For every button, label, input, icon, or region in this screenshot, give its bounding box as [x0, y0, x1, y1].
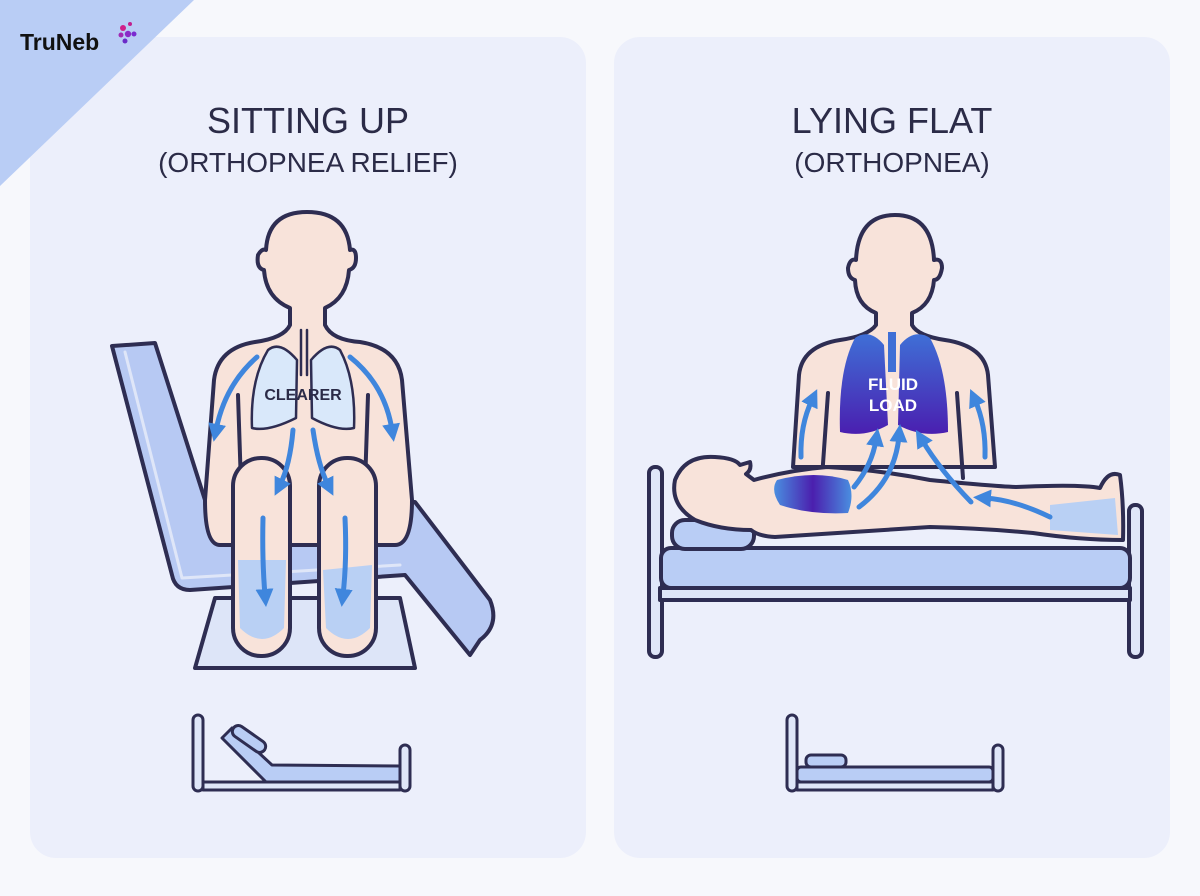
body [205, 212, 412, 656]
title: right [792, 100, 992, 178]
label: fluid load: FLUID [868, 375, 918, 394]
title: left: SITTING UP [207, 100, 409, 141]
icon: raised bed [193, 715, 410, 791]
icon: flat bed [787, 715, 1003, 791]
illustration: sitting [112, 212, 493, 668]
lying body [674, 457, 1123, 540]
lungs: fluid load [840, 332, 948, 434]
title: left [158, 100, 458, 178]
title: left: (ORTHOPNEA RELIEF) [158, 147, 458, 178]
chair [112, 343, 493, 668]
panel: left [30, 37, 586, 858]
standing torso [793, 215, 995, 478]
arrows: sitting [216, 357, 392, 595]
lungs: clearer [252, 330, 354, 429]
label: clearer: CLEARER [264, 387, 342, 404]
label: fluid load: LOAD [869, 396, 917, 415]
corner triangle [0, 0, 194, 186]
title: right: (ORTHOPNEA) [794, 147, 990, 178]
illustration: lying [649, 215, 1142, 657]
arrows: lying [801, 400, 1050, 517]
panel: right [614, 37, 1170, 858]
label: fluid load [868, 375, 918, 415]
logo: TruNeb [20, 29, 99, 55]
bed [649, 467, 1142, 657]
title: right: LYING FLAT [792, 100, 992, 141]
logo [20, 22, 136, 55]
